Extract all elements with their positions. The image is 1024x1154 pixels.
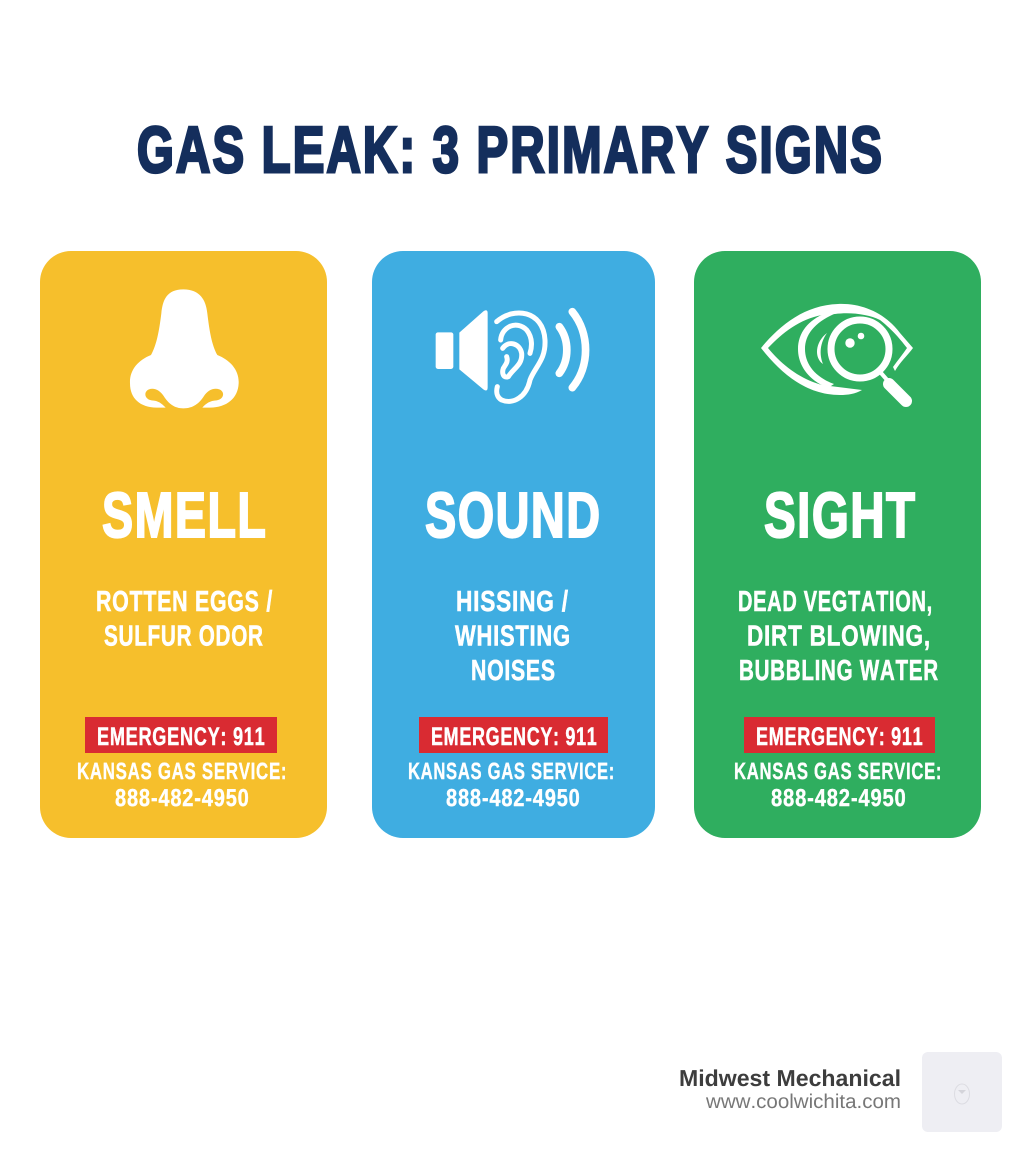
gas service contact: KANSAS GAS SERVICE: — [77, 758, 287, 784]
emergency badge: EMERGENCY: 911 — [97, 723, 265, 751]
website: www.coolwichita.com — [705, 1091, 901, 1113]
emergency badge — [419, 717, 608, 753]
emergency badge: EMERGENCY: 911 — [756, 723, 923, 751]
emergency badge — [744, 717, 935, 753]
smell heading: SMELL — [102, 479, 267, 551]
smell card background — [40, 251, 327, 838]
panel: sight — [694, 251, 981, 838]
emergency badge: EMERGENCY: 911 — [431, 723, 597, 751]
icon: speaker and ear — [436, 310, 586, 401]
gas service contact: 888-482-4950 — [446, 785, 581, 812]
gas service contact: 888-482-4950 — [115, 785, 250, 812]
company name: Midwest Mechanical — [679, 1065, 901, 1091]
sight heading: SIGHT — [764, 479, 917, 551]
gas service contact: KANSAS GAS SERVICE: — [408, 758, 615, 784]
smell description — [96, 586, 273, 652]
sound description: NOISES — [471, 655, 556, 687]
sight description — [738, 586, 939, 687]
sound description — [455, 586, 571, 687]
title: GAS LEAK: 3 PRIMARY SIGNS — [137, 113, 884, 186]
sight description: DIRT BLOWING, — [747, 620, 931, 652]
footer brand — [679, 1052, 1002, 1132]
panel: sound — [372, 251, 655, 838]
icon: eye with magnifying glass — [761, 304, 913, 401]
sight description: BUBBLING WATER — [739, 655, 939, 687]
smell description: ROTTEN EGGS / — [96, 586, 273, 618]
logo placeholder — [922, 1052, 1002, 1132]
panel: smell — [40, 251, 327, 838]
gas service contact: KANSAS GAS SERVICE: — [734, 758, 942, 784]
sound description: WHISTING — [455, 620, 571, 652]
sound card background — [372, 251, 655, 838]
gas service contact: 888-482-4950 — [771, 785, 907, 812]
sound description: HISSING / — [456, 586, 569, 618]
gas service contact — [408, 758, 615, 812]
smell description: SULFUR ODOR — [104, 620, 264, 652]
gas service contact — [734, 758, 942, 812]
gas service contact — [77, 758, 287, 812]
sight card background — [694, 251, 981, 838]
icon: nose — [130, 289, 239, 408]
sound heading: SOUND — [425, 479, 602, 551]
sight description: DEAD VEGTATION, — [738, 586, 933, 618]
emergency badge — [85, 717, 277, 753]
